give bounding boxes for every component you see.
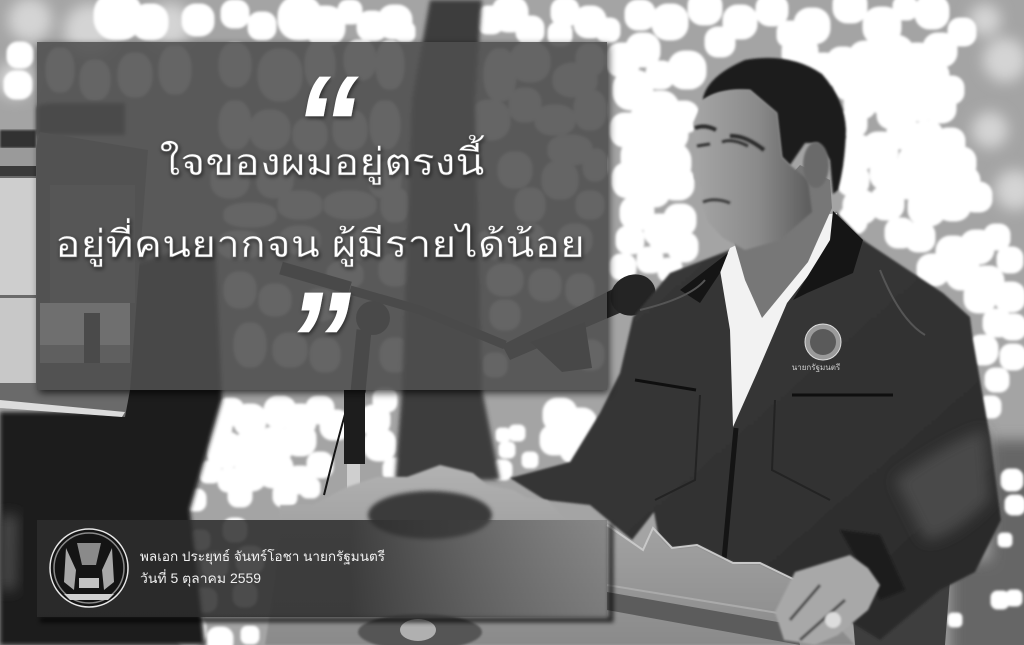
face (693, 90, 812, 250)
blobs below attribution panel and behind it (176, 616, 204, 644)
white shirt (720, 213, 837, 427)
right field (608, 45, 638, 75)
speaker name: พลเอก ประยุทธ์ จันทร์โอชา นายกรัฐมนตรี (140, 548, 385, 565)
photo: speaker in black jacket (510, 58, 1001, 645)
brows, eyes and mouth (695, 126, 764, 203)
closing quotation mark: ” (285, 262, 351, 419)
soft far-right highlights (0, 0, 1024, 210)
top strip (96, 0, 140, 38)
date: วันที่ 5 ตุลาคม 2559 (140, 569, 261, 587)
attribution panel (37, 520, 611, 620)
opening quotation mark: “ (293, 46, 359, 203)
icon: government emblem (50, 529, 128, 607)
quote line 1: ใจของผมอยู่ตรงนี้ (160, 134, 485, 185)
sleeve highlight (895, 430, 990, 540)
badge on jacket: นายกรัฐมนตรี (792, 363, 841, 372)
panel background (37, 42, 607, 390)
ear (803, 142, 829, 188)
photo: dark tree trunks and foreground (0, 0, 500, 645)
zippers and pockets (635, 380, 893, 395)
blobs below quote panel (204, 412, 230, 438)
photo: hand resting on podium (775, 555, 880, 645)
lit carved edge (607, 525, 795, 580)
poster chart showing through panel (40, 303, 130, 345)
quote panel (37, 42, 607, 419)
photo: carved wooden podium (265, 465, 855, 645)
collar bands (793, 211, 863, 300)
photo: microphone and stand (281, 267, 662, 495)
quote line 2: อยู่ที่คนยากจน ผู้มีรายได้น้อย (55, 218, 585, 267)
lower flower carving (358, 614, 482, 645)
panel background (37, 520, 607, 617)
dark wood stripe (607, 592, 800, 645)
photo: poster board at left (0, 132, 148, 417)
upper flower carving (368, 491, 492, 539)
blobs behind quote panel (48, 50, 72, 90)
dim lower right corner (950, 440, 1024, 645)
top right row (627, 2, 653, 28)
hair (703, 58, 846, 194)
trousers (850, 580, 950, 645)
jacket (510, 212, 1001, 640)
neck (733, 165, 832, 318)
jacket cuff (840, 530, 905, 600)
badge on jacket (792, 324, 841, 372)
lower right (1003, 471, 1021, 489)
panel shadow (40, 524, 611, 620)
